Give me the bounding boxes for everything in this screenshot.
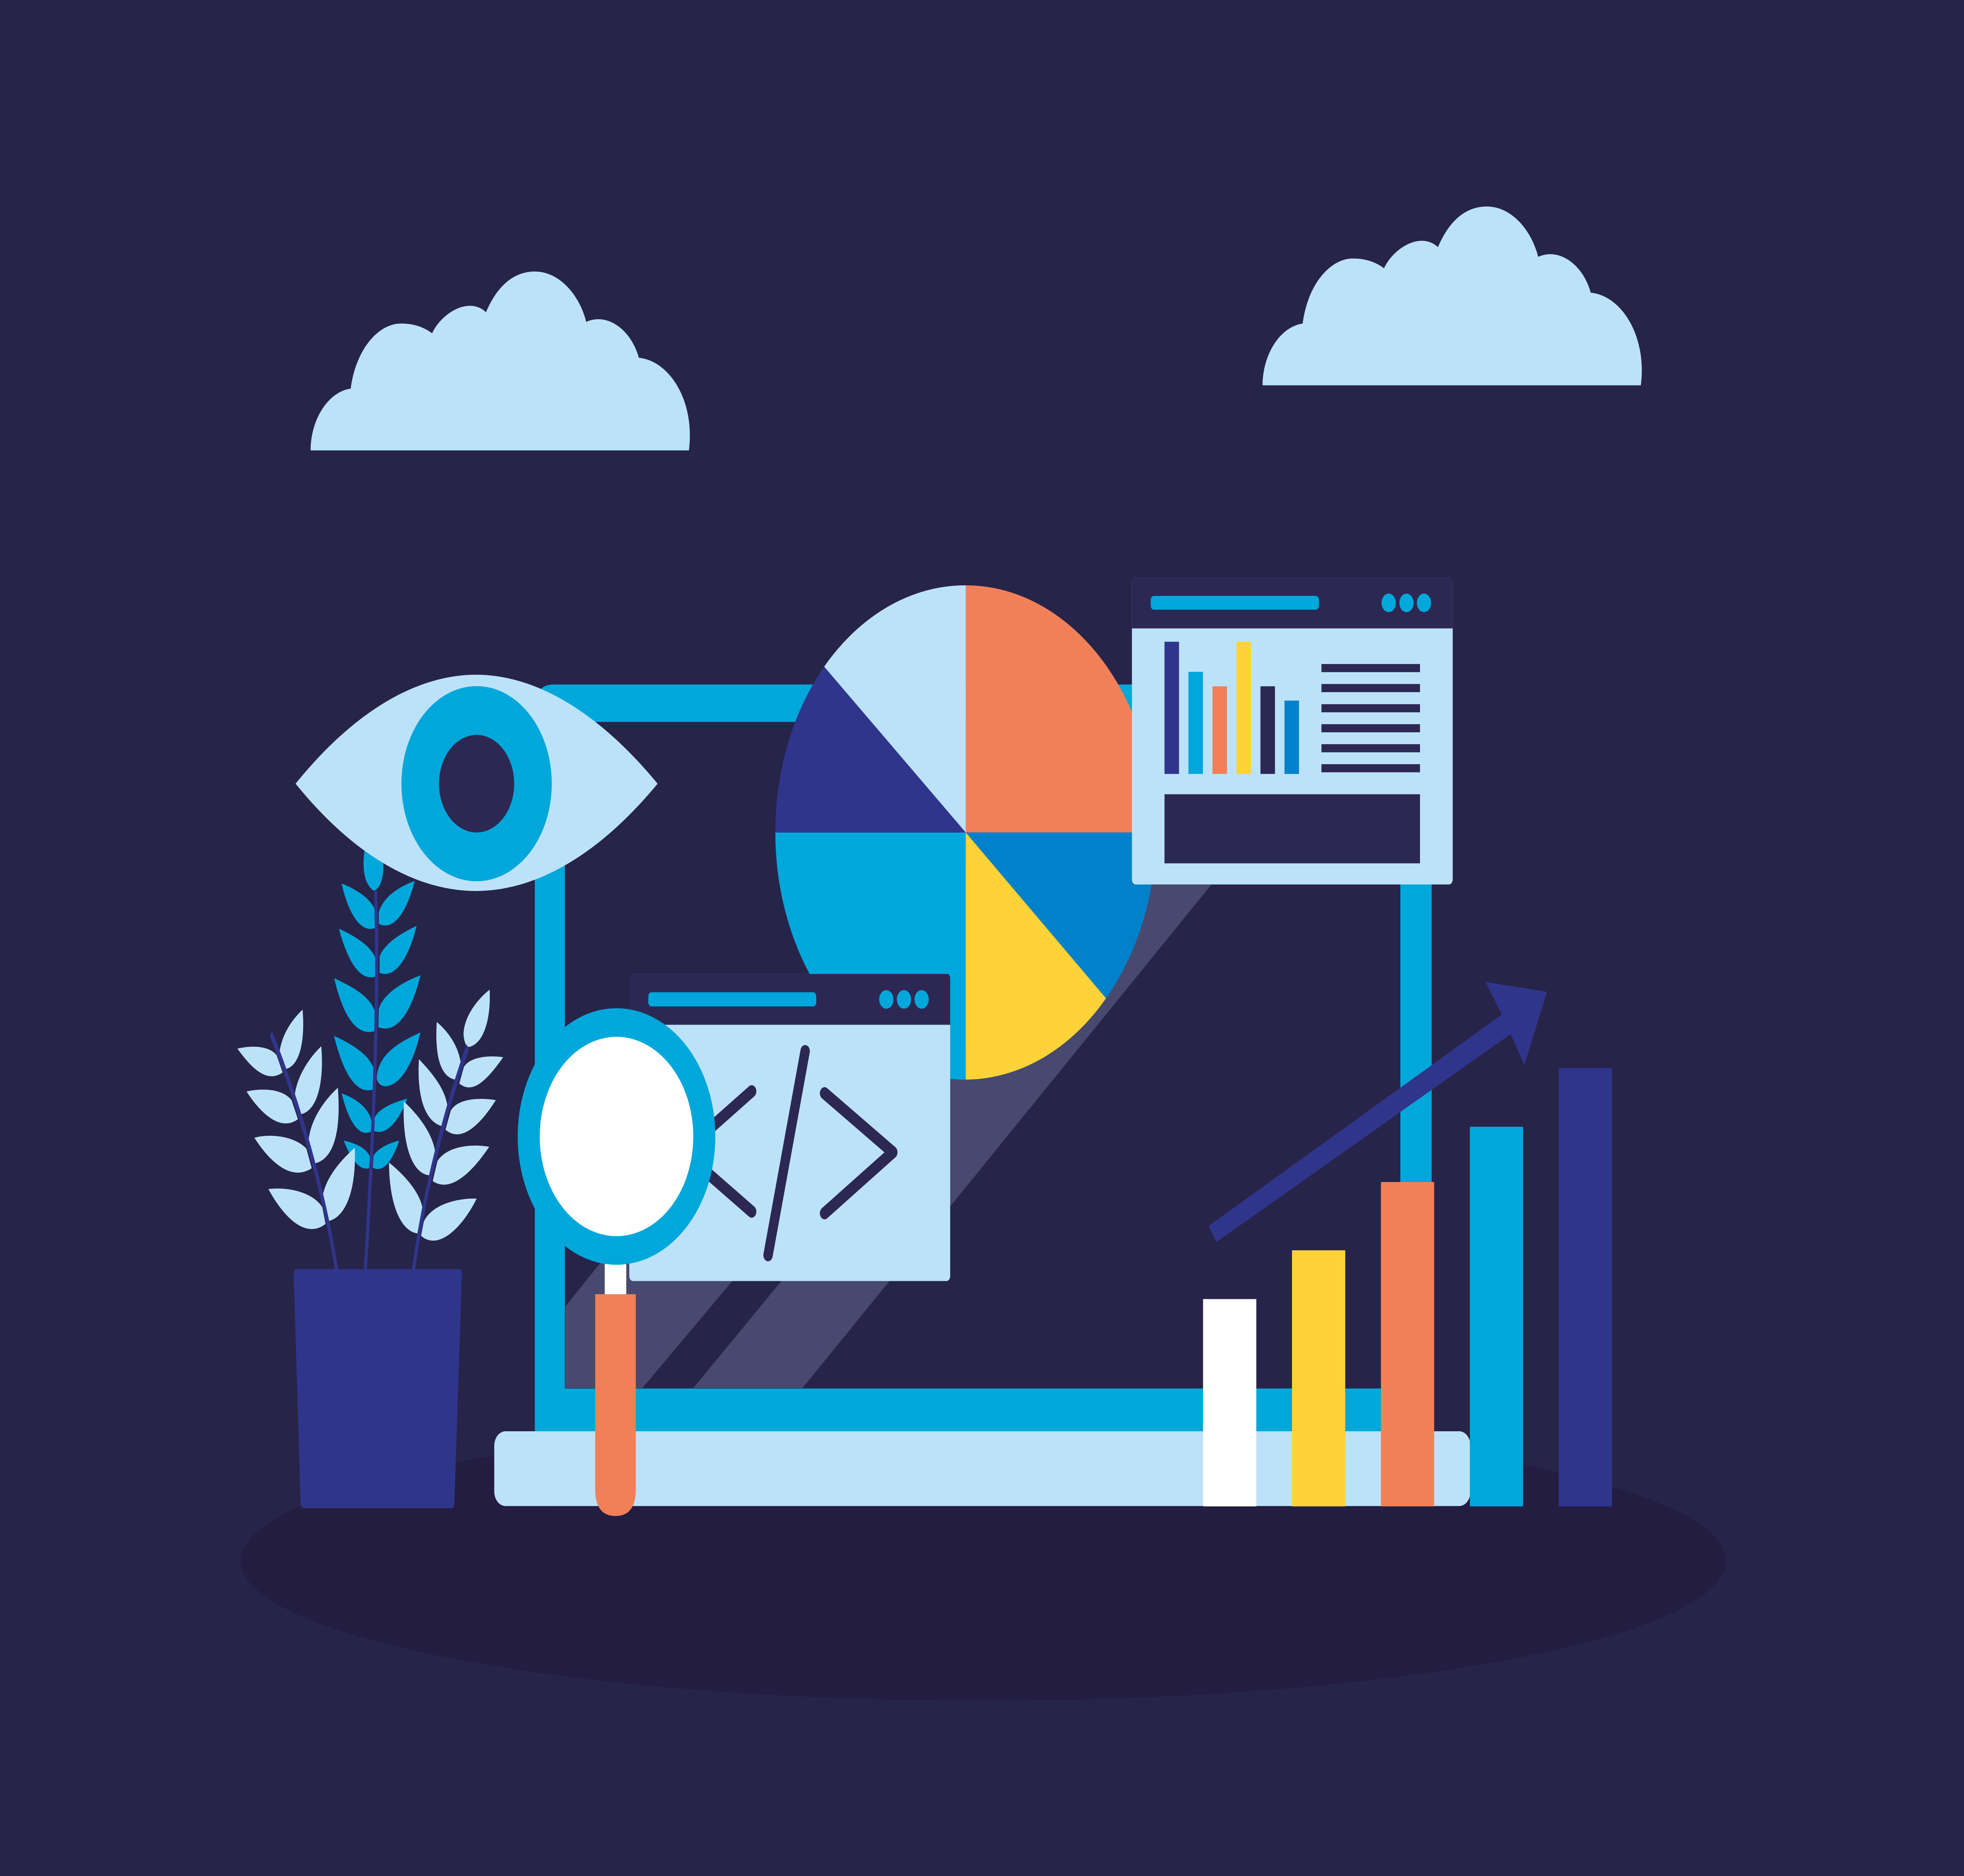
eye outline [296, 675, 658, 891]
bar chart: growth [1203, 1068, 1612, 1506]
address bar [649, 992, 816, 1007]
ground shadow ellipse [240, 1421, 1726, 1701]
slice: cyan [775, 833, 966, 1080]
laptop screen frame [535, 684, 1432, 1432]
iris [401, 686, 552, 881]
text lines [1321, 664, 1420, 772]
pupil [439, 735, 514, 833]
window title bar [1132, 578, 1453, 628]
panel: dashboard window [1132, 578, 1453, 884]
plant bud [364, 848, 383, 891]
plant [237, 848, 503, 1508]
right branch leaves [389, 990, 503, 1241]
slice: blue [966, 833, 1156, 998]
window dots [879, 990, 929, 1009]
magnifier neck [605, 1244, 626, 1296]
address bar [1151, 596, 1319, 610]
plant stems [271, 891, 468, 1271]
window title bar [629, 974, 950, 1025]
laptop base [494, 1431, 1471, 1506]
panel: code window [629, 974, 950, 1281]
icon: eye [296, 675, 658, 891]
magnifier handle [595, 1294, 636, 1516]
mini bar chart [1165, 642, 1299, 774]
cast shadows [565, 884, 1211, 1388]
plant pot [294, 1269, 462, 1508]
magnifier lens [540, 1037, 693, 1236]
slice: indigo [775, 667, 966, 833]
slice: light blue [824, 585, 966, 833]
cloud: left [311, 271, 690, 450]
content block [1165, 794, 1420, 863]
code symbol [683, 1051, 893, 1255]
window dots [1381, 594, 1431, 612]
window body [629, 974, 950, 1281]
slice: orange [966, 585, 1156, 833]
icon: magnifying glass [518, 1008, 715, 1516]
left branch leaves [237, 1010, 355, 1229]
window body [1132, 578, 1453, 884]
cloud: right [1262, 207, 1642, 385]
pie chart [775, 585, 1156, 1080]
magnifier ring [518, 1008, 715, 1265]
center branch leaves [334, 881, 420, 1169]
arrow: upward trend [1209, 982, 1547, 1242]
slice: yellow [966, 833, 1106, 1080]
